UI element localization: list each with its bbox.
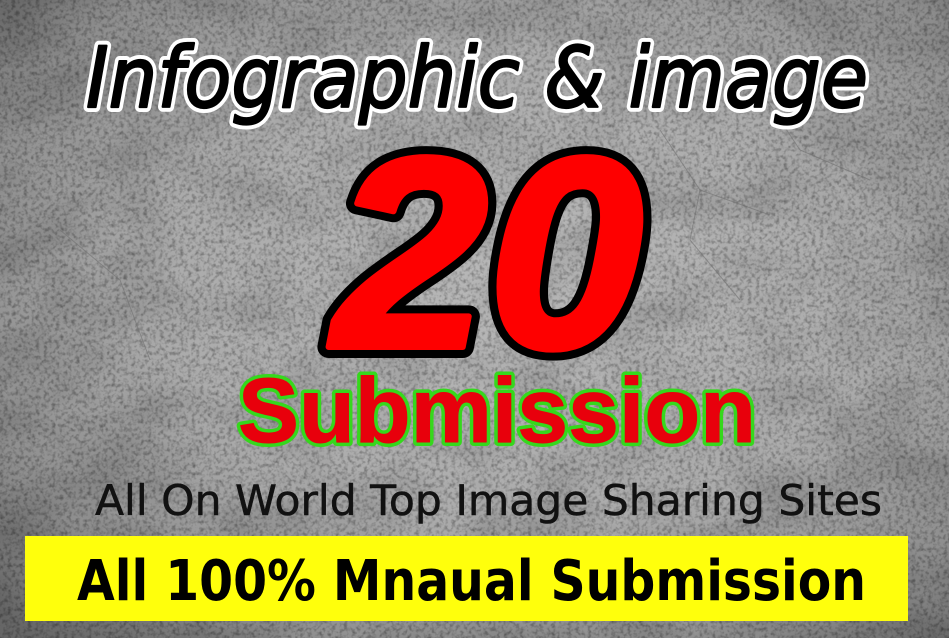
subtitle: All On World Top Image Sharing Sites [95, 476, 882, 525]
title: Infographic & image [86, 29, 868, 127]
submission heading: Submission [238, 360, 756, 462]
submission heading: Submission [238, 360, 756, 462]
number 20: 20 [329, 101, 643, 405]
title: Infographic & image [86, 29, 868, 127]
number 20: 20 [329, 101, 643, 405]
banner: manual submission [25, 536, 908, 621]
